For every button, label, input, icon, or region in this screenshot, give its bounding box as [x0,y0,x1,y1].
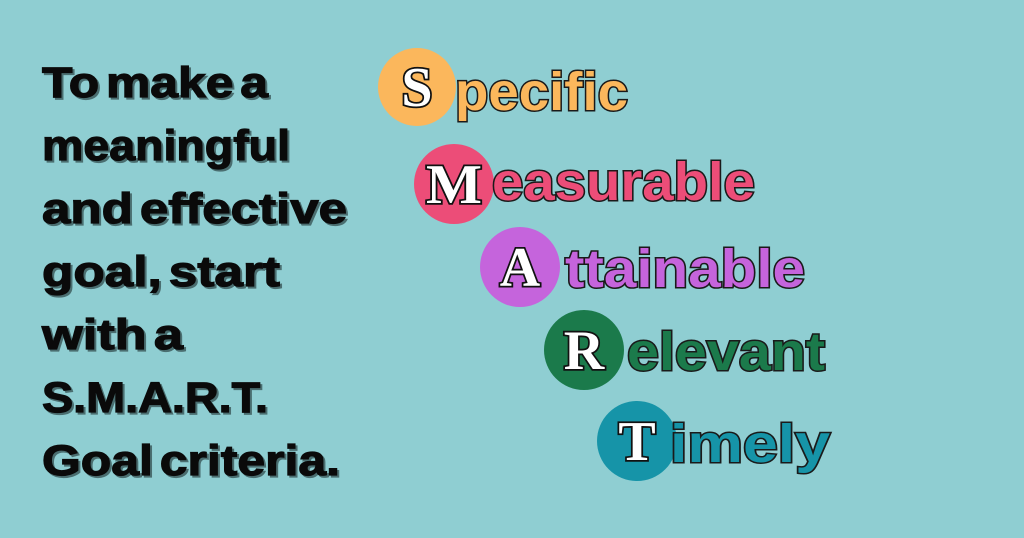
item: Relevant: elevant [627,322,825,382]
item: Attainable: A [500,237,541,299]
item: Specific: S [401,57,433,119]
item: Measurable [414,144,755,224]
item: Timely: T [618,411,656,473]
item: Timely: imely [670,414,830,474]
text block: intro: goal, start [42,248,280,296]
item: Attainable: ttainable [565,239,805,299]
text block: intro: To make a [42,59,269,107]
text block: intro: with a [41,311,184,359]
item: Measurable: M [426,154,482,216]
item: Specific: pecific [455,62,628,122]
item: Timely [597,401,830,481]
text block: intro [41,59,347,485]
item: Relevant: R [564,320,605,382]
text block: intro: meaningful [42,122,290,170]
item: Attainable [480,227,805,307]
item: Measurable: easurable [492,152,755,212]
text block: intro: S.M.A.R.T. [42,374,268,422]
item: Specific [378,48,628,126]
text block: intro: Goal criteria. [42,437,340,485]
item: Relevant [544,310,825,390]
text block: intro: and effective [42,185,347,233]
